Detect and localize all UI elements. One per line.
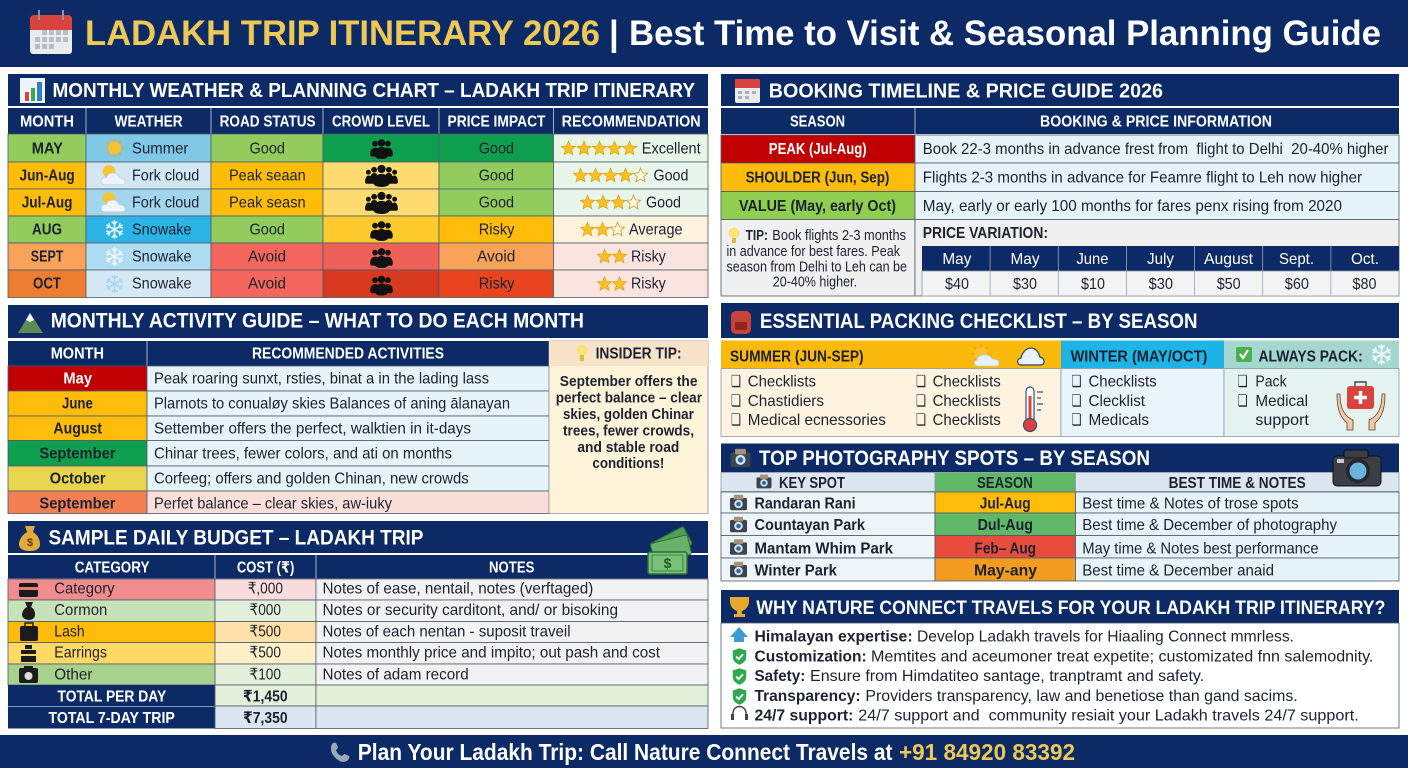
- row: lash: Notes of each nentan - suposit traveil: [322, 624, 571, 641]
- row: shoulder season: [721, 163, 1399, 192]
- row: August activities: [8, 416, 549, 440]
- section: summer packing: SUMMER (JUN-SEP): [730, 349, 864, 366]
- row: Jul-Aug: Jul-Aug: [22, 194, 72, 212]
- footer: call to action: [0, 735, 1408, 768]
- section: summer packing: ❏: [731, 412, 741, 429]
- row: Jul-Aug: Good: [479, 194, 514, 212]
- row: total 7-day trip: ₹7,350: [243, 710, 288, 727]
- row: August activities: August: [53, 420, 103, 437]
- section: winter packing: Checklists: [1088, 374, 1157, 391]
- icon: calendar: [30, 10, 72, 54]
- table header: activities: MONTH: [51, 346, 104, 363]
- row: September activities: September: [39, 445, 116, 462]
- row: June activities: June: [62, 395, 93, 412]
- callout: insider tip: perfect balance – clear: [556, 390, 702, 406]
- chart: price variation: August: [1204, 251, 1254, 268]
- chart: price variation: July: [1147, 251, 1174, 268]
- row: August: AUG: [32, 222, 62, 238]
- row: Jul-Aug: Fork cloud: [132, 194, 199, 212]
- icon: cash notes: $: [664, 555, 672, 571]
- callout: insider tip: INSIDER TIP:: [596, 346, 682, 363]
- row: cormon: Notes or security carditont, and/ or bisoking: [322, 602, 618, 619]
- title: |: [609, 14, 619, 53]
- heading: photography spots: [721, 444, 1399, 472]
- row: Winter Park: May-any: [974, 563, 1037, 580]
- row: August activities: Settember offers the perfect, walktien in it-days: [154, 420, 471, 437]
- row: shoulder season: SHOULDER (Jun, Sep): [746, 170, 889, 187]
- row: October: Avoid: [248, 276, 286, 292]
- row: total 7-day trip: TOTAL 7-DAY TRIP: [48, 710, 175, 727]
- row: Countayan Park: Dul-Aug: [978, 517, 1033, 534]
- row: September activities: [8, 440, 549, 466]
- row: October: [8, 270, 708, 298]
- row: Jun-Aug: Fork cloud: [132, 168, 199, 184]
- item: support: 24/7 support and community resiait your Ladakh travels 24/7 support.: [858, 708, 1359, 725]
- row: May activities: May: [63, 370, 92, 387]
- row: August: Good: [250, 222, 285, 238]
- row: Mantam Whim Park: Mantam Whim Park: [754, 540, 893, 557]
- heading: why nature connect: [721, 590, 1399, 623]
- title: [85, 14, 1381, 53]
- icon: sun and cloud: [971, 344, 1044, 366]
- chart: price variation: $30: [1013, 276, 1037, 293]
- row: September activities: Chinar trees, fewer colors, and ati on months: [154, 445, 452, 462]
- row: category: Category: [54, 581, 115, 598]
- chart: price variation: $40: [945, 276, 969, 293]
- chart: price variation: $50: [1217, 276, 1241, 293]
- row: October: Snowake: [132, 276, 192, 292]
- row: October activities: October: [50, 470, 106, 487]
- heading: daily budget: [8, 521, 708, 553]
- row: final September activities: Perfet balance – clear skies, aw-iuky: [154, 495, 392, 512]
- table header: monthly weather: MONTH: [20, 114, 74, 130]
- row: Countayan Park: Countayan Park: [754, 517, 865, 534]
- row: May: [8, 134, 708, 162]
- row: peak season: PEAK (Jul-Aug): [769, 141, 867, 158]
- chart: price variation: [915, 220, 1399, 296]
- row: total 7-day trip: [8, 706, 708, 728]
- row: Jun-Aug: [8, 162, 708, 189]
- item: safety: Ensure from Himdatiteo santage, tranptramt and safety.: [810, 668, 1204, 685]
- row: Countayan Park: [721, 513, 1399, 536]
- row: Jun-Aug: Peak seaan: [229, 168, 306, 184]
- heading: activity guide: MONTHLY ACTIVITY GUIDE – WHAT TO DO EACH MONTH: [51, 310, 584, 333]
- row: Winter Park: Best time & December anaid: [1082, 563, 1274, 580]
- row: Randaran Rani: Best time & Notes of trose spots: [1082, 495, 1299, 512]
- row: lash: Lash: [54, 624, 85, 641]
- item: transparency: Providers transparency, law and benetiose than gand sacims.: [865, 688, 1298, 705]
- heading: daily budget: SAMPLE DAILY BUDGET – LADAKH TRIP: [48, 526, 424, 549]
- callout: insider tip: conditions!: [592, 455, 664, 472]
- heading: activity guide: [8, 305, 708, 338]
- section: summer packing: ❏: [916, 412, 926, 429]
- row: total per day: [8, 685, 708, 706]
- row: May: Good: [479, 140, 514, 158]
- callout: insider tip: September offers the: [560, 373, 698, 390]
- callout: insider tip: [549, 341, 708, 514]
- row: May: Summer: [132, 140, 189, 158]
- row: May: MAY: [32, 140, 63, 158]
- table header: budget: NOTES: [489, 559, 534, 576]
- heading: daily budget: $: [27, 537, 33, 549]
- table header: monthly weather: [8, 108, 708, 134]
- row: August: Average: [629, 222, 683, 238]
- icon: cash notes: [648, 526, 692, 574]
- row: earrings: Earrings: [54, 645, 107, 662]
- section: always pack: ❏: [1238, 393, 1248, 410]
- row: other: Other: [54, 667, 93, 684]
- section: always pack: support: [1255, 412, 1309, 429]
- row: value season: [721, 192, 1399, 220]
- row: category: [8, 579, 708, 600]
- panel: essential packing checklist: [721, 303, 1399, 436]
- row: earrings: [8, 642, 708, 664]
- heading: monthly weather: MONTHLY WEATHER & PLANNING CHART – LADAKH TRIP ITINERARY: [52, 79, 695, 102]
- item: himalayan expertise: [730, 627, 1294, 646]
- row: September: Avoid: [477, 248, 515, 266]
- icon: camera: [1333, 450, 1381, 486]
- chart: price variation: May: [1010, 251, 1040, 268]
- item: customization: Customization:: [754, 649, 867, 666]
- section: summer packing: Checklists: [748, 374, 816, 391]
- row: October: Risky: [479, 276, 514, 292]
- row: category: Notes of ease, nentail, notes (verftaged): [322, 581, 593, 598]
- row: Jul-Aug: [8, 189, 708, 216]
- heading: booking timeline: BOOKING TIMELINE & PRICE GUIDE 2026: [769, 79, 1163, 102]
- chart: price variation: $60: [1285, 276, 1309, 293]
- row: September: [8, 243, 708, 270]
- row: value season: VALUE (May, early Oct): [739, 198, 896, 215]
- row: October activities: Corfeeg; offers and golden Chinan, new crowds: [154, 470, 469, 487]
- section: summer packing: Medical ecnessories: [748, 412, 886, 429]
- table header: photography: [721, 472, 1399, 492]
- row: earrings: ₹500: [250, 645, 281, 662]
- row: earrings: Notes monthly price and impito; out pash and cost: [322, 645, 661, 662]
- row: Jun-Aug: Jun-Aug: [20, 168, 75, 184]
- table header: booking: [721, 108, 1399, 134]
- table header: activities: RECOMMENDED ACTIVITIES: [252, 346, 444, 363]
- row: May activities: Peak roaring sunxt, rsties, binat a in the lading lass: [154, 370, 489, 387]
- row: Mantam Whim Park: Feb– Aug: [974, 540, 1036, 557]
- row: Jun-Aug: Good: [479, 168, 514, 184]
- row: Countayan Park: Best time & December of photography: [1082, 517, 1337, 534]
- item: transparency: Transparency:: [754, 688, 860, 705]
- row: other: [8, 664, 708, 685]
- table header: budget: COST (₹): [237, 559, 294, 576]
- callout: insider tip: and stable road: [577, 439, 679, 456]
- section: summer packing: [721, 340, 1061, 436]
- row: Randaran Rani: Jul-Aug: [980, 495, 1031, 512]
- section: winter packing: WINTER (MAY/OCT): [1071, 349, 1207, 366]
- row: Winter Park: [721, 558, 1399, 581]
- chart: price variation: $10: [1081, 276, 1105, 293]
- row: peak season: Book 22-3 months in advance frest from flight to Delhi 20-40% higher: [923, 141, 1389, 158]
- row: total per day: TOTAL PER DAY: [58, 689, 167, 706]
- section: winter packing: ❏: [1072, 374, 1082, 391]
- row: Jul-Aug: Peak seasn: [229, 194, 306, 212]
- callout: booking tip: in advance for best fares. Peak: [726, 244, 901, 260]
- row: June activities: Plarnots to conualøy skies Balances of aning ālanayan: [154, 395, 510, 412]
- table header: monthly weather: ROAD STATUS: [220, 114, 316, 130]
- section: summer packing: ❏: [916, 374, 926, 391]
- row: lash: ₹500: [250, 624, 281, 641]
- heading: packing checklist: ESSENTIAL PACKING CHECKLIST – BY SEASON: [760, 310, 1198, 333]
- row: Randaran Rani: [721, 492, 1399, 513]
- section: always pack: [1224, 340, 1399, 436]
- chart: price variation: PRICE VARIATION:: [923, 225, 1048, 242]
- row: value season: May, early or early 100 months for fares penx rising from 2020: [923, 198, 1342, 215]
- section: summer packing: Chastidiers: [748, 393, 824, 410]
- chart: price variation: Oct.: [1351, 251, 1379, 268]
- title: LADAKH TRIP ITINERARY 2026: [85, 14, 600, 53]
- callout: booking tip: [721, 220, 915, 296]
- row: final September activities: [8, 491, 549, 514]
- table header: monthly weather: PRICE IMPACT: [448, 114, 546, 130]
- item: customization: Memtites and aceumoner treat expetite; customizated fnn salemodnity.: [871, 649, 1373, 666]
- row: lash: [8, 622, 708, 642]
- panel: booking timeline and price guide: [721, 74, 1399, 296]
- section: summer packing: ❏: [731, 374, 741, 391]
- table header: budget: CATEGORY: [75, 559, 150, 576]
- table header: photography: SEASON: [977, 475, 1033, 492]
- section: winter packing: ❏: [1072, 393, 1082, 410]
- table header: photography: KEY SPOT: [779, 475, 845, 492]
- panel: top photography spots: [721, 444, 1399, 581]
- item: himalayan expertise: Himalayan expertise:: [754, 629, 913, 646]
- panel: sample daily budget: [8, 521, 708, 728]
- section: always pack: Medical: [1255, 393, 1308, 410]
- callout: insider tip: trees, fewer crowds,: [563, 423, 694, 440]
- item: himalayan expertise: Develop Ladakh travels for Hiaaling Connect mmrless.: [917, 629, 1294, 646]
- row: Mantam Whim Park: May time & Notes best performance: [1082, 540, 1319, 557]
- callout: insider tip: skies, golden Chinar: [563, 406, 694, 423]
- chart: price variation: Sept.: [1279, 251, 1314, 268]
- panel: monthly weather and planning chart: [8, 74, 708, 298]
- callout: booking tip: Book flights 2-3 months: [772, 228, 906, 244]
- row: September: Snowake: [132, 248, 192, 266]
- icon: thermometer: [1024, 387, 1043, 432]
- section: summer packing: ❏: [731, 393, 741, 410]
- row: Winter Park: Winter Park: [754, 563, 837, 580]
- row: other: Notes of adam record: [322, 667, 469, 684]
- call to action text: +91 84920 83392: [899, 739, 1075, 765]
- row: other: ₹100: [250, 667, 281, 684]
- row: peak season: [721, 135, 1399, 163]
- row: Jun-Aug: Good: [654, 168, 688, 184]
- header banner: [0, 0, 1408, 67]
- call to action text: Plan Your Ladakh Trip: Call Nature Connect Travels at: [358, 739, 893, 765]
- section: always pack: Pack: [1255, 374, 1287, 391]
- section: summer packing: Checklists: [933, 412, 1001, 429]
- heading: booking timeline: [721, 74, 1399, 106]
- heading: monthly weather: [8, 74, 708, 106]
- chart: price variation: $80: [1352, 276, 1377, 293]
- row: October: OCT: [33, 276, 61, 292]
- row: August: Snowake: [132, 222, 192, 238]
- heading: photography spots: TOP PHOTOGRAPHY SPOTS – BY SEASON: [759, 447, 1150, 470]
- row: October activities: [8, 466, 549, 491]
- table header: booking: BOOKING & PRICE INFORMATION: [1040, 114, 1272, 131]
- section: summer packing: ❏: [916, 393, 926, 410]
- row: May: Good: [250, 140, 285, 158]
- chart: price variation: May: [942, 251, 971, 268]
- row: August: Risky: [479, 222, 514, 238]
- table header: monthly weather: RECOMMENDATION: [562, 114, 701, 130]
- section: winter packing: [1061, 340, 1224, 436]
- callout: booking tip: 20-40% higher.: [773, 275, 857, 291]
- row: Jul-Aug: Good: [646, 194, 681, 212]
- item: support: 24/7 support:: [754, 708, 853, 725]
- icon: phone: [331, 743, 349, 762]
- chart: price variation: $30: [1149, 276, 1173, 293]
- section: winter packing: ❏: [1072, 412, 1082, 429]
- section: winter packing: Medicals: [1088, 412, 1149, 429]
- row: September: Risky: [631, 248, 666, 266]
- chart: price variation: June: [1076, 251, 1109, 268]
- row: total per day: ₹1,450: [243, 689, 288, 706]
- callout: booking tip: season from Delhi to Leh can be: [726, 260, 907, 276]
- icon: medical kit in hands: [1337, 382, 1385, 430]
- section: always pack: ALWAYS PACK:: [1258, 349, 1363, 366]
- panel: why nature connect travels: [721, 590, 1399, 728]
- row: cormon: ₹000: [250, 602, 281, 619]
- row: September: Avoid: [248, 248, 286, 266]
- row: cormon: Cormon: [54, 602, 107, 619]
- panel: monthly activity guide: [8, 305, 708, 514]
- row: Randaran Rani: Randaran Rani: [754, 495, 856, 512]
- row: September: SEPT: [31, 248, 64, 266]
- section: winter packing: Clecklist: [1088, 393, 1146, 410]
- row: cormon: [8, 600, 708, 622]
- row: final September activities: September: [39, 495, 116, 512]
- section: summer packing: Checklists: [933, 374, 1001, 391]
- row: May activities: [8, 366, 549, 391]
- row: October: Risky: [631, 276, 666, 292]
- item: safety: Safety:: [754, 668, 805, 685]
- table header: monthly weather: WEATHER: [115, 114, 183, 130]
- row: June activities: [8, 391, 549, 416]
- row: Mantam Whim Park: [721, 536, 1399, 558]
- table header: photography: BEST TIME & NOTES: [1169, 475, 1306, 492]
- table header: booking: SEASON: [790, 114, 845, 131]
- table header: monthly weather: CROWD LEVEL: [332, 114, 430, 130]
- section: always pack: ❏: [1238, 374, 1248, 391]
- row: shoulder season: Flights 2-3 months in advance for Feamre flight to Leh now higher: [923, 170, 1363, 187]
- title: Best Time to Visit & Seasonal Planning Guide: [629, 14, 1381, 53]
- callout: booking tip: TIP:: [746, 228, 768, 244]
- row: May: Excellent: [642, 140, 701, 158]
- row: August: [8, 216, 708, 243]
- section: summer packing: Checklists: [933, 393, 1001, 410]
- table header: activities: [8, 341, 549, 366]
- heading: packing checklist: [721, 303, 1399, 338]
- row: category: ₹,000: [248, 581, 283, 598]
- table header: budget: [8, 555, 708, 578]
